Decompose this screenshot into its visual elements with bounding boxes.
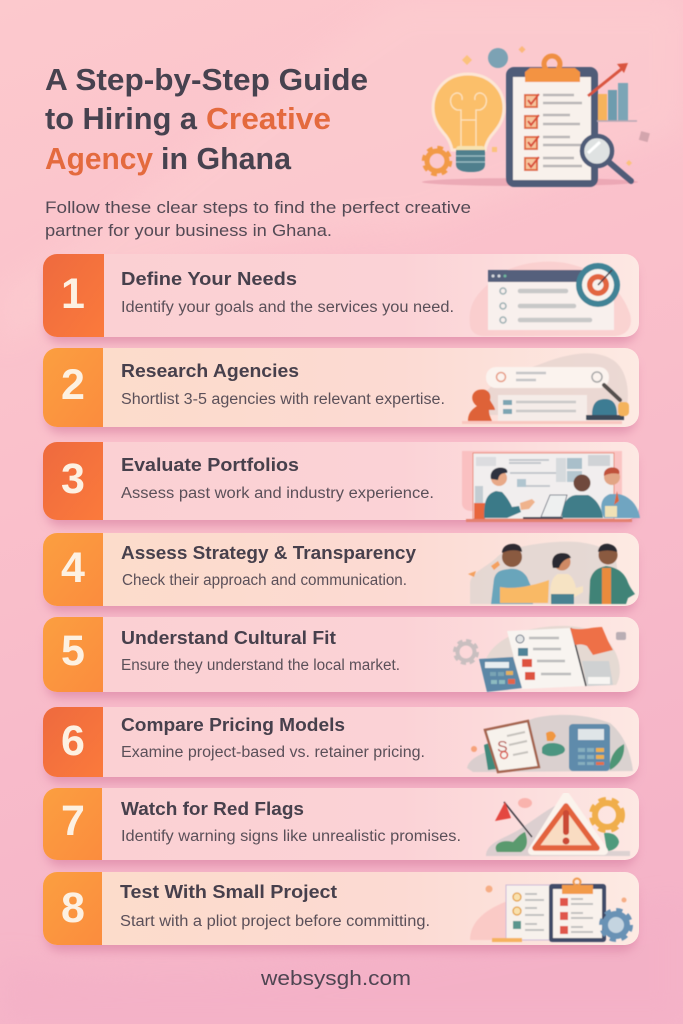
step 8 text bbox=[120, 881, 430, 930]
step number 4: 4 bbox=[61, 544, 85, 592]
step 6 text: Compare Pricing Models bbox=[121, 714, 345, 735]
step 1 text: Define Your Needs bbox=[121, 268, 297, 289]
step 3 text: Assess past work and industry experience. bbox=[121, 485, 434, 502]
step 7 text bbox=[121, 798, 461, 845]
step number 2: 2 bbox=[61, 361, 85, 409]
step 8 text: Test With Small Project bbox=[120, 881, 337, 902]
step 3 text: Evaluate Portfolios bbox=[121, 454, 299, 475]
title bbox=[45, 62, 368, 176]
step 1 text bbox=[121, 268, 454, 316]
step 7 text: Identify warning signs like unrealistic promises. bbox=[121, 828, 461, 845]
panel: step 2 bbox=[43, 348, 639, 433]
panel: step 3 bbox=[43, 442, 640, 526]
step number 6 bbox=[43, 707, 103, 777]
icon: search bar and desk bbox=[462, 353, 629, 424]
step number 1: 1 bbox=[61, 270, 85, 318]
step 4 text: Assess Strategy & Transparency bbox=[121, 542, 417, 563]
intro text: Follow these clear steps to find the perfect creative bbox=[45, 198, 471, 217]
icon: clipboard checklist bbox=[506, 56, 598, 187]
step 5 text bbox=[121, 627, 400, 674]
step 1 text: Identify your goals and the services you need. bbox=[121, 299, 454, 316]
panel: step 5 bbox=[43, 617, 639, 698]
panel: step 1 bbox=[43, 254, 639, 343]
step 4 text bbox=[121, 542, 417, 589]
step number 7: 7 bbox=[61, 797, 85, 845]
illustration: price list and calculator bbox=[467, 715, 633, 772]
illustration: agency meeting bbox=[462, 451, 640, 522]
step 4 text: Check their approach and communication. bbox=[122, 572, 407, 589]
icon: light bulb bbox=[433, 74, 504, 172]
step number 3 bbox=[43, 442, 103, 520]
step number 6: 6 bbox=[61, 717, 85, 765]
header illustration bbox=[422, 46, 650, 187]
step 5 text: Understand Cultural Fit bbox=[121, 627, 336, 648]
step number 8 bbox=[43, 872, 102, 945]
illustration: team with document bbox=[468, 542, 635, 604]
illustration: price list and calculator: S bbox=[497, 739, 508, 756]
icon: bar chart with arrow bbox=[588, 63, 637, 121]
icon: magnifying glass bbox=[582, 136, 631, 181]
panel: step 7 bbox=[43, 788, 639, 866]
step number 1 bbox=[43, 254, 104, 337]
step 2 text: Research Agencies bbox=[121, 360, 299, 381]
footer website: websysgh.com bbox=[260, 968, 411, 990]
step 2 text bbox=[121, 360, 445, 408]
step 7 text: Watch for Red Flags bbox=[121, 798, 304, 819]
title: to Hiring a bbox=[45, 101, 198, 136]
step number 5 bbox=[43, 617, 103, 692]
title: in Ghana bbox=[161, 141, 292, 176]
icon: gear bbox=[424, 148, 450, 174]
step number 4 bbox=[43, 533, 103, 606]
step 2 text: Shortlist 3-5 agencies with relevant expertise. bbox=[121, 391, 445, 408]
intro text bbox=[45, 198, 471, 240]
step 6 text bbox=[121, 714, 425, 761]
step 3 text bbox=[121, 454, 434, 502]
illustration: checklists and gear bbox=[470, 878, 630, 942]
title: A Step-by-Step Guide bbox=[45, 62, 368, 97]
step 5 text: Ensure they understand the local market. bbox=[121, 657, 400, 674]
step number 5: 5 bbox=[61, 627, 85, 675]
panel: step 4 bbox=[43, 533, 639, 612]
step number 8: 8 bbox=[61, 884, 85, 932]
panel: step 6 bbox=[43, 707, 639, 783]
illustration: checklist book, flag, calculator bbox=[455, 626, 626, 692]
step 6 text: Examine project-based vs. retainer pricing. bbox=[121, 744, 425, 761]
panel: step 8 bbox=[43, 872, 639, 951]
icon: browser window with target bbox=[470, 262, 631, 336]
step number 7 bbox=[43, 788, 102, 860]
step number 3: 3 bbox=[61, 455, 85, 503]
step 8 text: Start with a pliot project before committing. bbox=[120, 913, 430, 930]
title: Creative bbox=[206, 101, 331, 136]
title: Agency bbox=[45, 141, 154, 176]
illustration: warning triangle and red flag bbox=[486, 796, 630, 856]
intro text: partner for your business in Ghana. bbox=[45, 221, 332, 240]
step number 2 bbox=[43, 348, 103, 427]
